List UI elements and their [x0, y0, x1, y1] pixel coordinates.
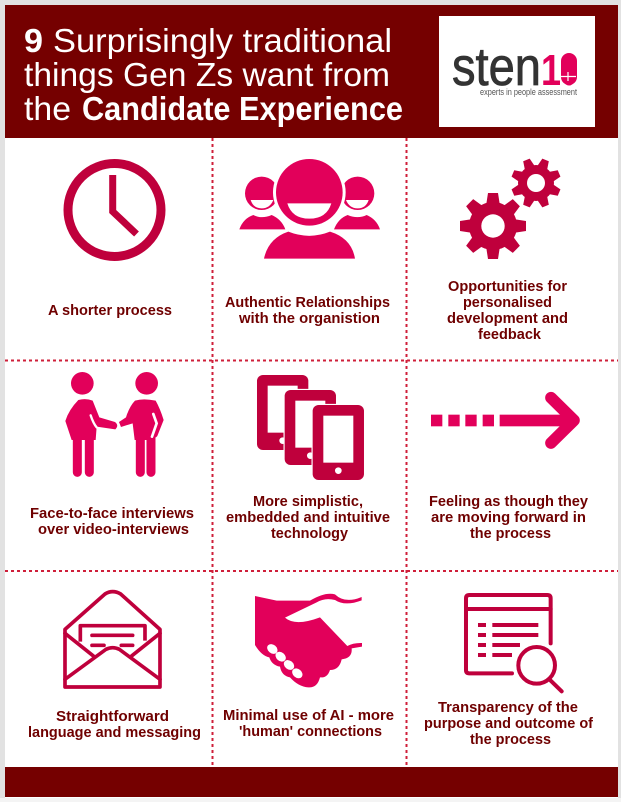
- logo: sten10: [439, 16, 595, 127]
- label: minimal use of AI: [223, 708, 394, 740]
- label: a shorter process: A shorter process: [48, 303, 172, 319]
- panel: face-to-face interviews: [30, 372, 194, 538]
- label: transparency: the process: [470, 732, 551, 748]
- label: straightforward language: language and messaging: [28, 725, 201, 741]
- label: face-to-face interviews: Face-to-face interviews: [30, 506, 194, 522]
- label: moving forward: are moving forward in: [431, 510, 586, 526]
- panel: straightforward language: [28, 592, 201, 741]
- icon: tablets: [257, 375, 364, 480]
- label: personalised development: [447, 279, 568, 343]
- logo: sten10: experts in people assessment: [480, 87, 577, 97]
- panel: transparency: [424, 595, 593, 748]
- label: personalised development: development and: [447, 311, 568, 327]
- label: moving forward: Feeling as though they: [429, 494, 588, 510]
- icon: handshake: [255, 594, 362, 687]
- icon: document with magnifier: [466, 595, 562, 691]
- label: personalised development: feedback: [478, 327, 542, 343]
- footer bar: [5, 767, 618, 797]
- label: face-to-face interviews: [30, 506, 194, 538]
- title: Candidate Experience: [82, 90, 403, 127]
- panel: a shorter process: [48, 164, 172, 319]
- panel: moving forward: [429, 398, 588, 542]
- label: transparency: [424, 700, 593, 748]
- label: moving forward: [429, 494, 588, 542]
- panel: minimal use of AI: [223, 594, 394, 740]
- logo: sten10: 0: [561, 46, 577, 95]
- icon: dashed arrow: [431, 398, 574, 443]
- title: things Gen Zs want from: [24, 56, 390, 93]
- panel: personalised development: [447, 158, 568, 343]
- label: transparency: purpose and outcome of: [424, 716, 593, 732]
- logo: sten10: sten: [452, 37, 541, 97]
- label: minimal use of AI: 'human' connections: [239, 724, 382, 740]
- label: intuitive technology: More simplistic,: [253, 494, 363, 510]
- icon: clock: [68, 164, 161, 256]
- label: moving forward: the process: [470, 526, 551, 542]
- label: intuitive technology: embedded and intuitive: [226, 510, 390, 526]
- label: transparency: Transparency of the: [438, 700, 578, 716]
- label: minimal use of AI: Minimal use of AI - more: [223, 708, 394, 724]
- icon: gears: [460, 158, 561, 259]
- label: authentic relationships: with the organistion: [238, 311, 380, 327]
- icon: open envelope: [65, 592, 160, 687]
- title: 9: [24, 22, 43, 59]
- label: face-to-face interviews: over video-interviews: [38, 522, 189, 538]
- header banner: [5, 5, 618, 138]
- label: authentic relationships: Authentic Relationships: [225, 295, 390, 311]
- icon: two people meeting: [65, 372, 164, 472]
- logo: sten10: 1: [541, 46, 561, 95]
- icon: group of people: [239, 156, 380, 259]
- title: the: [24, 90, 71, 127]
- label: intuitive technology: technology: [271, 526, 348, 542]
- label: straightforward language: [28, 709, 201, 741]
- label: intuitive technology: [226, 494, 390, 542]
- panel: intuitive technology: [226, 375, 390, 542]
- panel: authentic relationships: [225, 156, 390, 327]
- label: personalised development: Opportunities for: [448, 279, 567, 295]
- label: straightforward language: Straightforward: [56, 709, 169, 725]
- title: Surprisingly traditional: [53, 22, 392, 59]
- label: authentic relationships: [225, 295, 390, 327]
- label: personalised development: personalised: [463, 295, 552, 311]
- title: [24, 22, 403, 127]
